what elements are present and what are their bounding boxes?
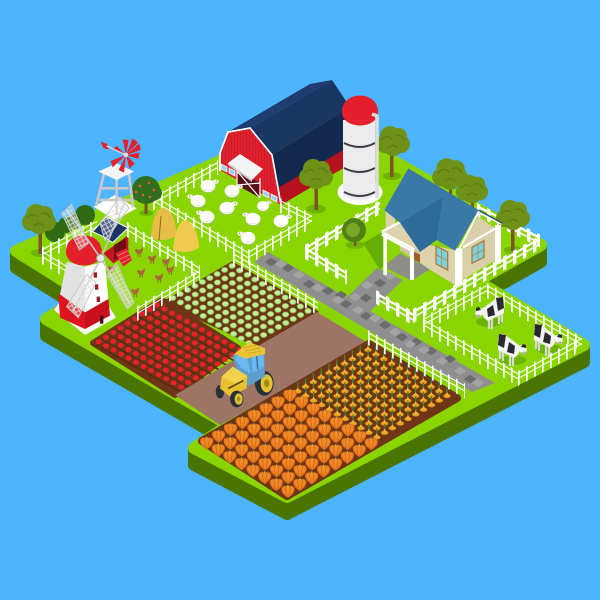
- tractor: [216, 342, 274, 407]
- dirt road: [175, 312, 368, 425]
- field: pumpkins and carrots soil: [202, 344, 457, 496]
- barn roof: [228, 80, 332, 132]
- front roof left face: [400, 197, 443, 252]
- island ground: [16, 118, 584, 514]
- chickens: [108, 247, 174, 297]
- tractor roof: [234, 342, 265, 359]
- bushes: [45, 205, 95, 242]
- island grass top: [16, 118, 584, 497]
- right wing wall: [462, 217, 496, 280]
- windmill blades: [62, 197, 134, 318]
- right gable trim: [458, 212, 502, 251]
- barn door: [228, 154, 263, 198]
- field: lettuce: [165, 263, 317, 346]
- main roof: [384, 168, 478, 251]
- front roof right face: [437, 197, 478, 251]
- cow pen fences: [423, 283, 582, 352]
- cow pen front fences: [423, 317, 582, 386]
- windmill dome: [66, 235, 102, 265]
- house shadow: [363, 230, 386, 270]
- house yard left fence: [305, 200, 380, 284]
- carrots: [294, 341, 451, 439]
- porch inner wall: [400, 232, 420, 263]
- barn windows: [221, 164, 277, 202]
- tractor cab: [233, 348, 265, 386]
- tree: far left: [22, 204, 56, 257]
- left window: [436, 246, 448, 270]
- tractor rear wheel: [255, 371, 274, 396]
- stone path: [254, 252, 495, 392]
- small round tree: [342, 218, 366, 249]
- house back fence: [477, 203, 540, 248]
- back wall: [386, 210, 395, 235]
- wind pump tower: [93, 138, 141, 220]
- silo dome: [342, 96, 378, 126]
- tractor far wheel: [216, 385, 224, 398]
- tractor hood: [220, 367, 247, 397]
- tree: behind silo: [376, 126, 410, 180]
- porch floor: [383, 253, 431, 281]
- apple tree: [130, 176, 162, 216]
- right window: [472, 241, 484, 263]
- house front fence: [376, 235, 540, 326]
- island side thickness: [16, 119, 584, 514]
- lettuce fence: [233, 251, 318, 315]
- wind pump rotor: [101, 138, 141, 173]
- chicken pen fences: [42, 219, 200, 321]
- coop ramp: [115, 248, 132, 267]
- lower field fence: [368, 330, 465, 398]
- barn gable wall: [220, 128, 281, 205]
- house: [363, 168, 502, 285]
- tree: right of house: [496, 200, 530, 254]
- barn side wall: [276, 143, 352, 205]
- porch gable: [382, 222, 420, 252]
- windmill base plate: [54, 301, 116, 335]
- main wall: [420, 243, 456, 285]
- chicken coop: [93, 217, 132, 267]
- tree: in front of barn: [299, 159, 333, 214]
- barn: [220, 80, 352, 205]
- silo: [338, 96, 382, 205]
- corner posts: [455, 248, 462, 285]
- sheep: [187, 180, 292, 246]
- windmill tower: [60, 262, 85, 312]
- silo pipe: [372, 114, 377, 198]
- windmill red base: [58, 293, 85, 329]
- door: [414, 252, 420, 263]
- field: tomatoes: [93, 300, 242, 395]
- cows: [475, 297, 563, 366]
- pumpkins: [200, 389, 378, 498]
- windmill: [54, 197, 134, 335]
- hay stacks: [151, 208, 199, 252]
- lettuce rows: [169, 263, 312, 346]
- tractor front wheel: [230, 391, 243, 407]
- tomato rows: [96, 302, 242, 393]
- sheep pen fences: [153, 160, 312, 265]
- trees behind the house: [432, 158, 488, 216]
